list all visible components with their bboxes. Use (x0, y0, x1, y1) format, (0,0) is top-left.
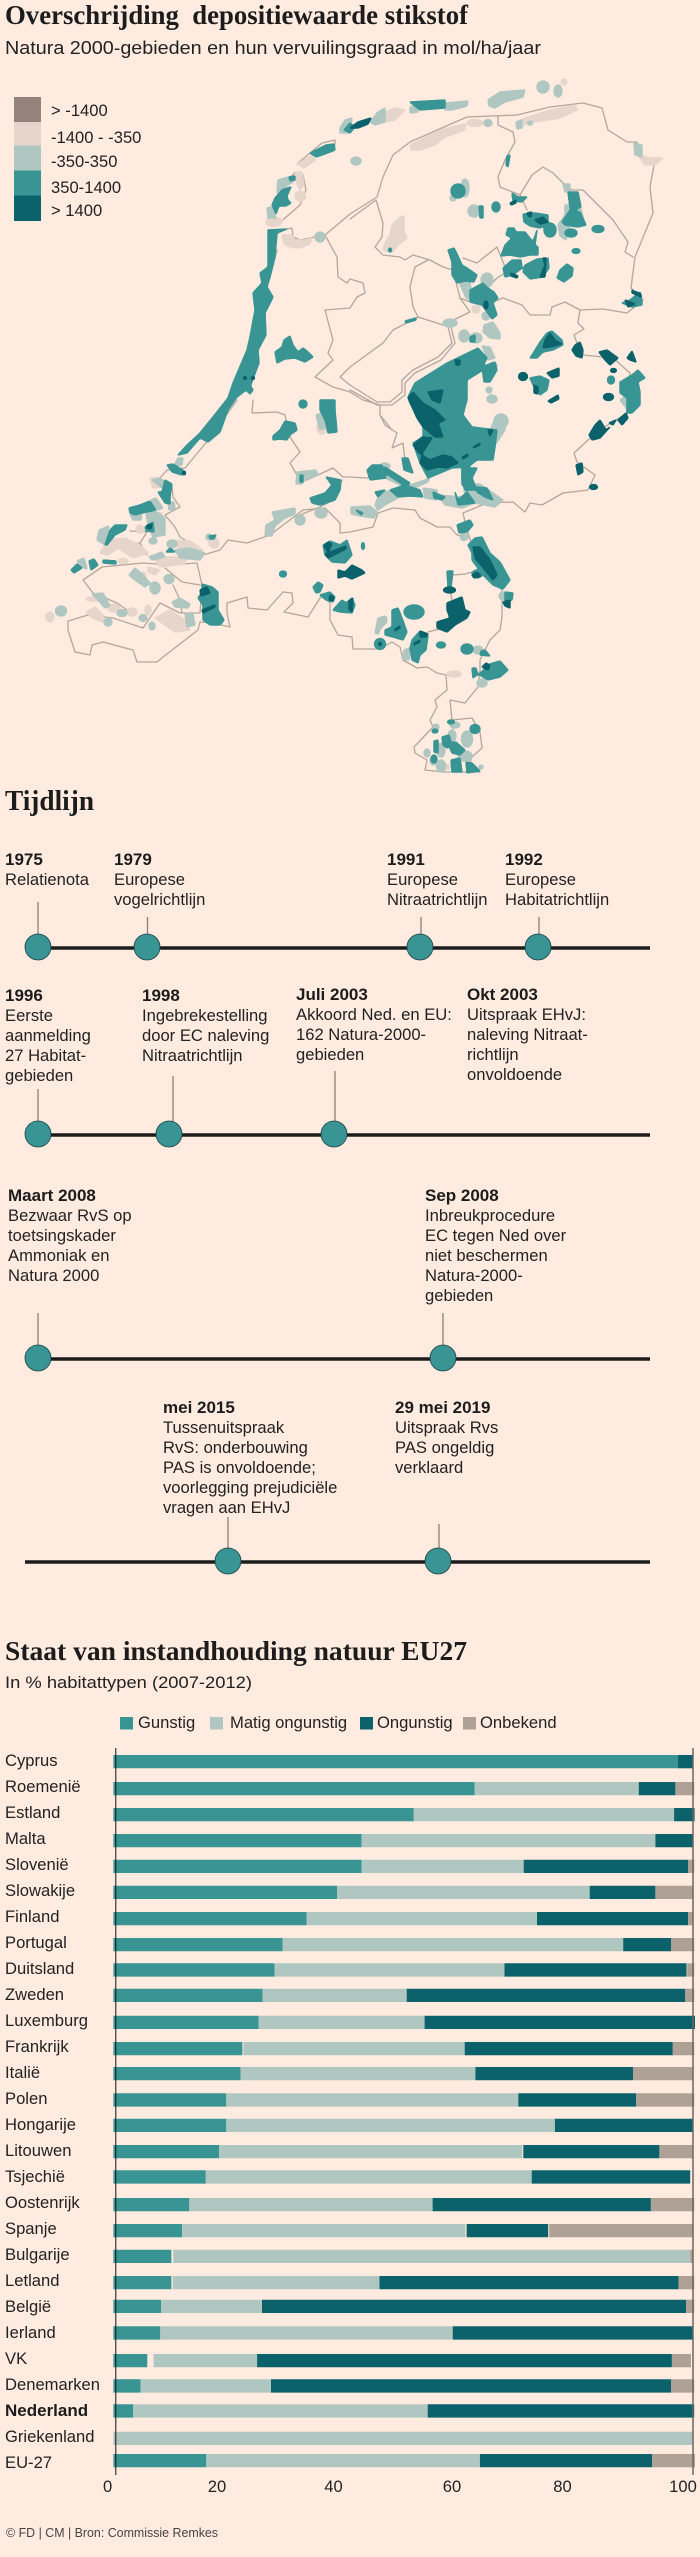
country labels: België (5, 2297, 51, 2316)
country labels: EU-27 (5, 2453, 52, 2472)
axis tick labels (103, 2477, 697, 2496)
country labels: Finland (5, 1907, 59, 1926)
map legend: -1400 - -350 (51, 128, 141, 147)
bars (113, 1755, 695, 2467)
country labels: Denemarken (5, 2375, 100, 2394)
subtitle: Natura 2000-gebieden en hun vervuilingsgraad in mol/ha/jaar (5, 38, 541, 58)
timeline row 1: 1992 (505, 850, 543, 869)
timeline row 2: Nitraatrichtlijn (142, 1046, 243, 1065)
axis tick labels: 40 (324, 2477, 343, 2496)
pale areas (46, 79, 663, 770)
axis tick labels: 100 (669, 2477, 697, 2496)
timeline row 2: 1996 (5, 986, 43, 1005)
medium teal areas (71, 100, 645, 773)
timeline row 3: EC tegen Ned over (425, 1226, 567, 1245)
timeline row 2: gebieden (296, 1045, 364, 1064)
country labels: Frankrijk (5, 2037, 69, 2056)
country labels: Estland (5, 1803, 60, 1822)
timeline row 3: Natura 2000 (8, 1266, 99, 1285)
timeline row 1: Habitatrichtlijn (505, 890, 609, 909)
country labels: Litouwen (5, 2141, 71, 2160)
chart legend (120, 1713, 557, 1732)
timeline row 1 (5, 850, 650, 960)
timeline row 1: Relatienota (5, 870, 90, 889)
timeline row 4 (25, 1398, 650, 1574)
timeline row 1: Europese (505, 870, 576, 889)
timeline row 2: naleving Nitraat- (467, 1025, 588, 1044)
timeline row 3: gebieden (425, 1286, 493, 1305)
chart legend: Ongunstig (377, 1713, 453, 1732)
timeline row 4: verklaard (395, 1458, 463, 1477)
timeline row 3: niet beschermen (425, 1246, 548, 1265)
axis tick labels: 60 (443, 2477, 461, 2496)
chart legend: Matig ongunstig (230, 1713, 347, 1732)
timeline row 2: Uitspraak EHvJ: (467, 1005, 586, 1024)
timeline row 4: voorlegging prejudiciële (163, 1478, 337, 1497)
chart subtitle: In % habitattypen (2007-2012) (5, 1673, 252, 1692)
map legend: -350-350 (51, 152, 117, 171)
country labels: Slovenië (5, 1855, 69, 1874)
timeline row 3: Inbreukprocedure (425, 1206, 555, 1225)
title: Overschrijding depositiewaarde stikstof (5, 0, 469, 30)
map legend: 350-1400 (51, 178, 121, 197)
map legend: > -1400 (51, 101, 108, 120)
timeline row 4: 29 mei 2019 (395, 1398, 490, 1417)
stacked bar chart (5, 1748, 697, 2496)
axis tick labels: 20 (208, 2477, 226, 2496)
timeline row 3: toetsingskader (8, 1226, 116, 1245)
heading: nature conservation: Staat van instandhouding natuur EU27 (5, 1636, 467, 1666)
timeline row 1: Europese (114, 870, 185, 889)
country labels: Luxemburg (5, 2011, 88, 2030)
timeline row 2: 1998 (142, 986, 180, 1005)
timeline row 2: Juli 2003 (296, 985, 368, 1004)
country labels: Ierland (5, 2323, 56, 2342)
timeline row 2: Okt 2003 (467, 985, 538, 1004)
country labels: Bulgarije (5, 2245, 70, 2264)
timeline row 4: Uitspraak Rvs (395, 1418, 498, 1437)
timeline row 3: Ammoniak en (8, 1246, 109, 1265)
country labels: Tsjechië (5, 2167, 65, 2186)
axes (116, 1748, 693, 2475)
axis tick labels: 80 (553, 2477, 572, 2496)
country labels (5, 1751, 100, 2472)
country labels: Griekenland (5, 2427, 94, 2446)
country labels: Zweden (5, 1985, 64, 2004)
map legend (14, 97, 141, 221)
timeline row 1: Europese (387, 870, 458, 889)
country labels: Slowakije (5, 1881, 75, 1900)
timeline row 2: aanmelding (5, 1026, 91, 1045)
province outlines (68, 103, 654, 772)
chart legend: Onbekend (480, 1713, 557, 1732)
timeline row 4: PAS is onvoldoende; (163, 1458, 316, 1477)
map legend: > 1400 (51, 201, 102, 220)
timeline row 3: Sep 2008 (425, 1186, 499, 1205)
light areas (56, 81, 642, 772)
timeline row 2: richtlijn (467, 1045, 519, 1064)
timeline row 3: Maart 2008 (8, 1186, 96, 1205)
country labels: Portugal (5, 1933, 67, 1952)
timeline row 2: door EC naleving (142, 1026, 269, 1045)
timeline row 4: PAS ongeldig (395, 1438, 494, 1457)
axis tick labels: 0 (103, 2477, 112, 2496)
country labels: Italië (5, 2063, 40, 2082)
country labels: VK (5, 2349, 27, 2368)
timeline row 2: Eerste (5, 1006, 53, 1025)
timeline row 2: onvoldoende (467, 1065, 562, 1084)
country labels: Cyprus (5, 1751, 58, 1770)
timeline row 2 (5, 985, 650, 1147)
timeline row 1: 1979 (114, 850, 152, 869)
country labels: Spanje (5, 2219, 57, 2238)
heading: timeline: Tijdlijn (5, 785, 94, 817)
country labels: Oostenrijk (5, 2193, 80, 2212)
timeline row 3: Bezwaar RvS op (8, 1206, 132, 1225)
timeline row 1: 1975 (5, 850, 43, 869)
timeline row 2: 27 Habitat- (5, 1046, 86, 1065)
timeline row 1: 1991 (387, 850, 425, 869)
timeline row 3: Natura-2000- (425, 1266, 523, 1285)
timeline row 3 (8, 1186, 650, 1371)
country labels: Duitsland (5, 1959, 74, 1978)
timeline row 2: gebieden (5, 1066, 73, 1085)
country labels: Roemenië (5, 1777, 81, 1796)
country labels: Hongarije (5, 2115, 76, 2134)
country labels: Nederland (5, 2401, 88, 2420)
map of the Netherlands (46, 79, 663, 773)
country labels: Polen (5, 2089, 47, 2108)
timeline row 4: RvS: onderbouwing (163, 1438, 308, 1457)
timeline row 4: Tussenuitspraak (163, 1418, 285, 1437)
source line: © FD | CM | Bron: Commissie Remkes (6, 2525, 218, 2540)
dark teal areas (147, 118, 641, 670)
chart legend: Gunstig (138, 1713, 195, 1732)
timeline row 2: Akkoord Ned. en EU: (296, 1005, 452, 1024)
country labels: Malta (5, 1829, 46, 1848)
timeline row 2: 162 Natura-2000- (296, 1025, 426, 1044)
timeline row 1: Nitraatrichtlijn (387, 890, 488, 909)
country labels: Letland (5, 2271, 59, 2290)
timeline row 2: Ingebrekestelling (142, 1006, 267, 1025)
timeline row 4: mei 2015 (163, 1398, 235, 1417)
timeline row 1: vogelrichtlijn (114, 890, 205, 909)
timeline row 4: vragen aan EHvJ (163, 1498, 290, 1517)
